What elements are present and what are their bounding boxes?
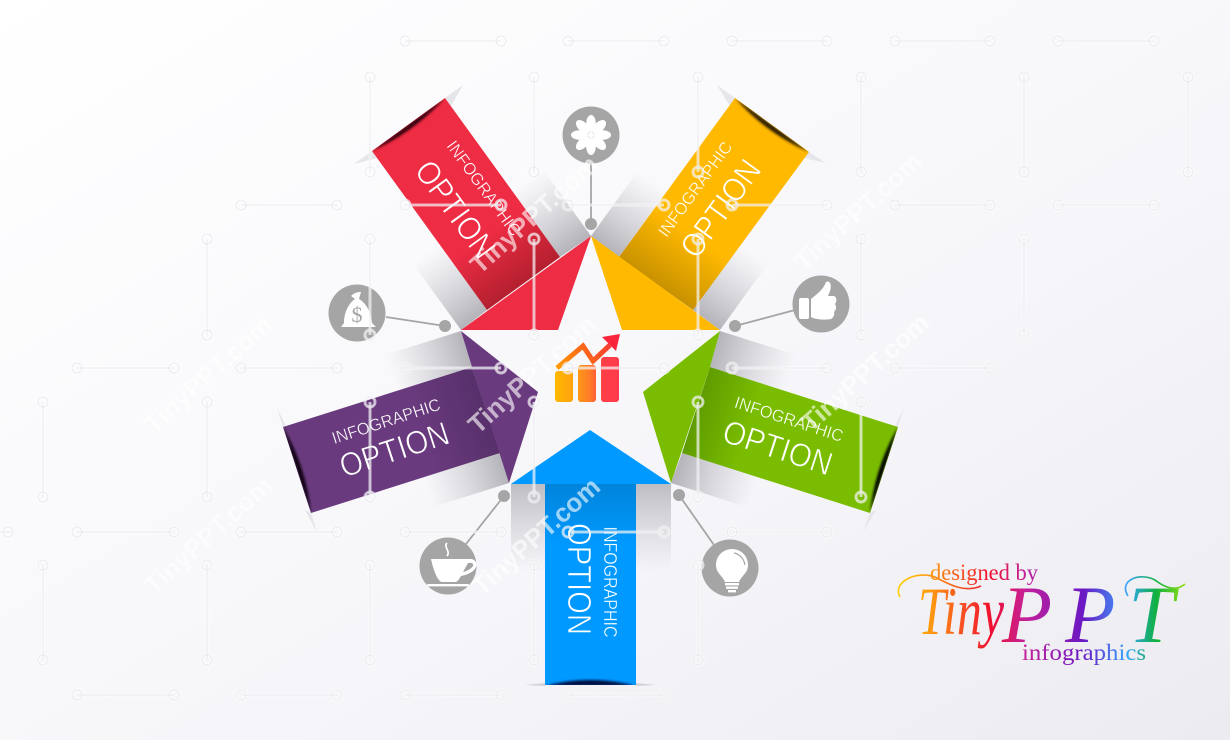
text: red label: INFOGRAPHIC xyxy=(443,137,524,240)
panel: red arm xyxy=(354,85,591,330)
text: red label: OPTION xyxy=(408,153,503,265)
icon: money bag xyxy=(328,284,451,342)
icon: coffee cup xyxy=(420,490,510,594)
icon: money bag: $ xyxy=(352,302,362,327)
text: green label: OPTION xyxy=(718,412,837,483)
watermarks: TinyPPT.com xyxy=(138,470,278,600)
logo: designed by TinyPPT infographics: designed by xyxy=(930,560,1038,585)
icon: growth chart xyxy=(555,334,620,402)
logo: designed by TinyPPT infographics: PPT xyxy=(1001,569,1179,660)
text: blue label xyxy=(561,523,620,638)
logo: designed by TinyPPT infographics: Tiny xyxy=(918,573,1005,649)
watermarks xyxy=(138,146,935,601)
text: purple label: INFOGRAPHIC xyxy=(329,395,443,448)
panel: blue arm xyxy=(511,430,671,686)
text: purple label: OPTION xyxy=(335,414,454,485)
text: yellow label: OPTION xyxy=(673,152,768,264)
panel: green arm xyxy=(643,331,904,532)
icon: flower xyxy=(562,106,620,230)
panel: yellow arm xyxy=(591,85,826,330)
watermarks: TinyPPT.com xyxy=(138,309,278,439)
watermarks: TinyPPT.com xyxy=(795,307,935,437)
icon: thumbs up xyxy=(729,276,850,332)
watermarks: TinyPPT.com xyxy=(466,471,606,601)
logo: designed by TinyPPT infographics: infographics xyxy=(1022,640,1146,665)
watermarks: TinyPPT.com xyxy=(788,146,928,276)
watermarks: TinyPPT.com xyxy=(462,309,602,439)
text: blue label: OPTION xyxy=(561,523,598,635)
panel: purple arm xyxy=(277,331,538,532)
logo: designed by TinyPPT infographics xyxy=(898,560,1185,665)
text: green label: INFOGRAPHIC xyxy=(732,393,846,446)
text: yellow label: INFOGRAPHIC xyxy=(655,138,736,241)
watermarks: TinyPPT.com xyxy=(464,149,604,279)
icon: light bulb xyxy=(673,489,758,596)
text: blue label: INFOGRAPHIC xyxy=(600,526,620,638)
